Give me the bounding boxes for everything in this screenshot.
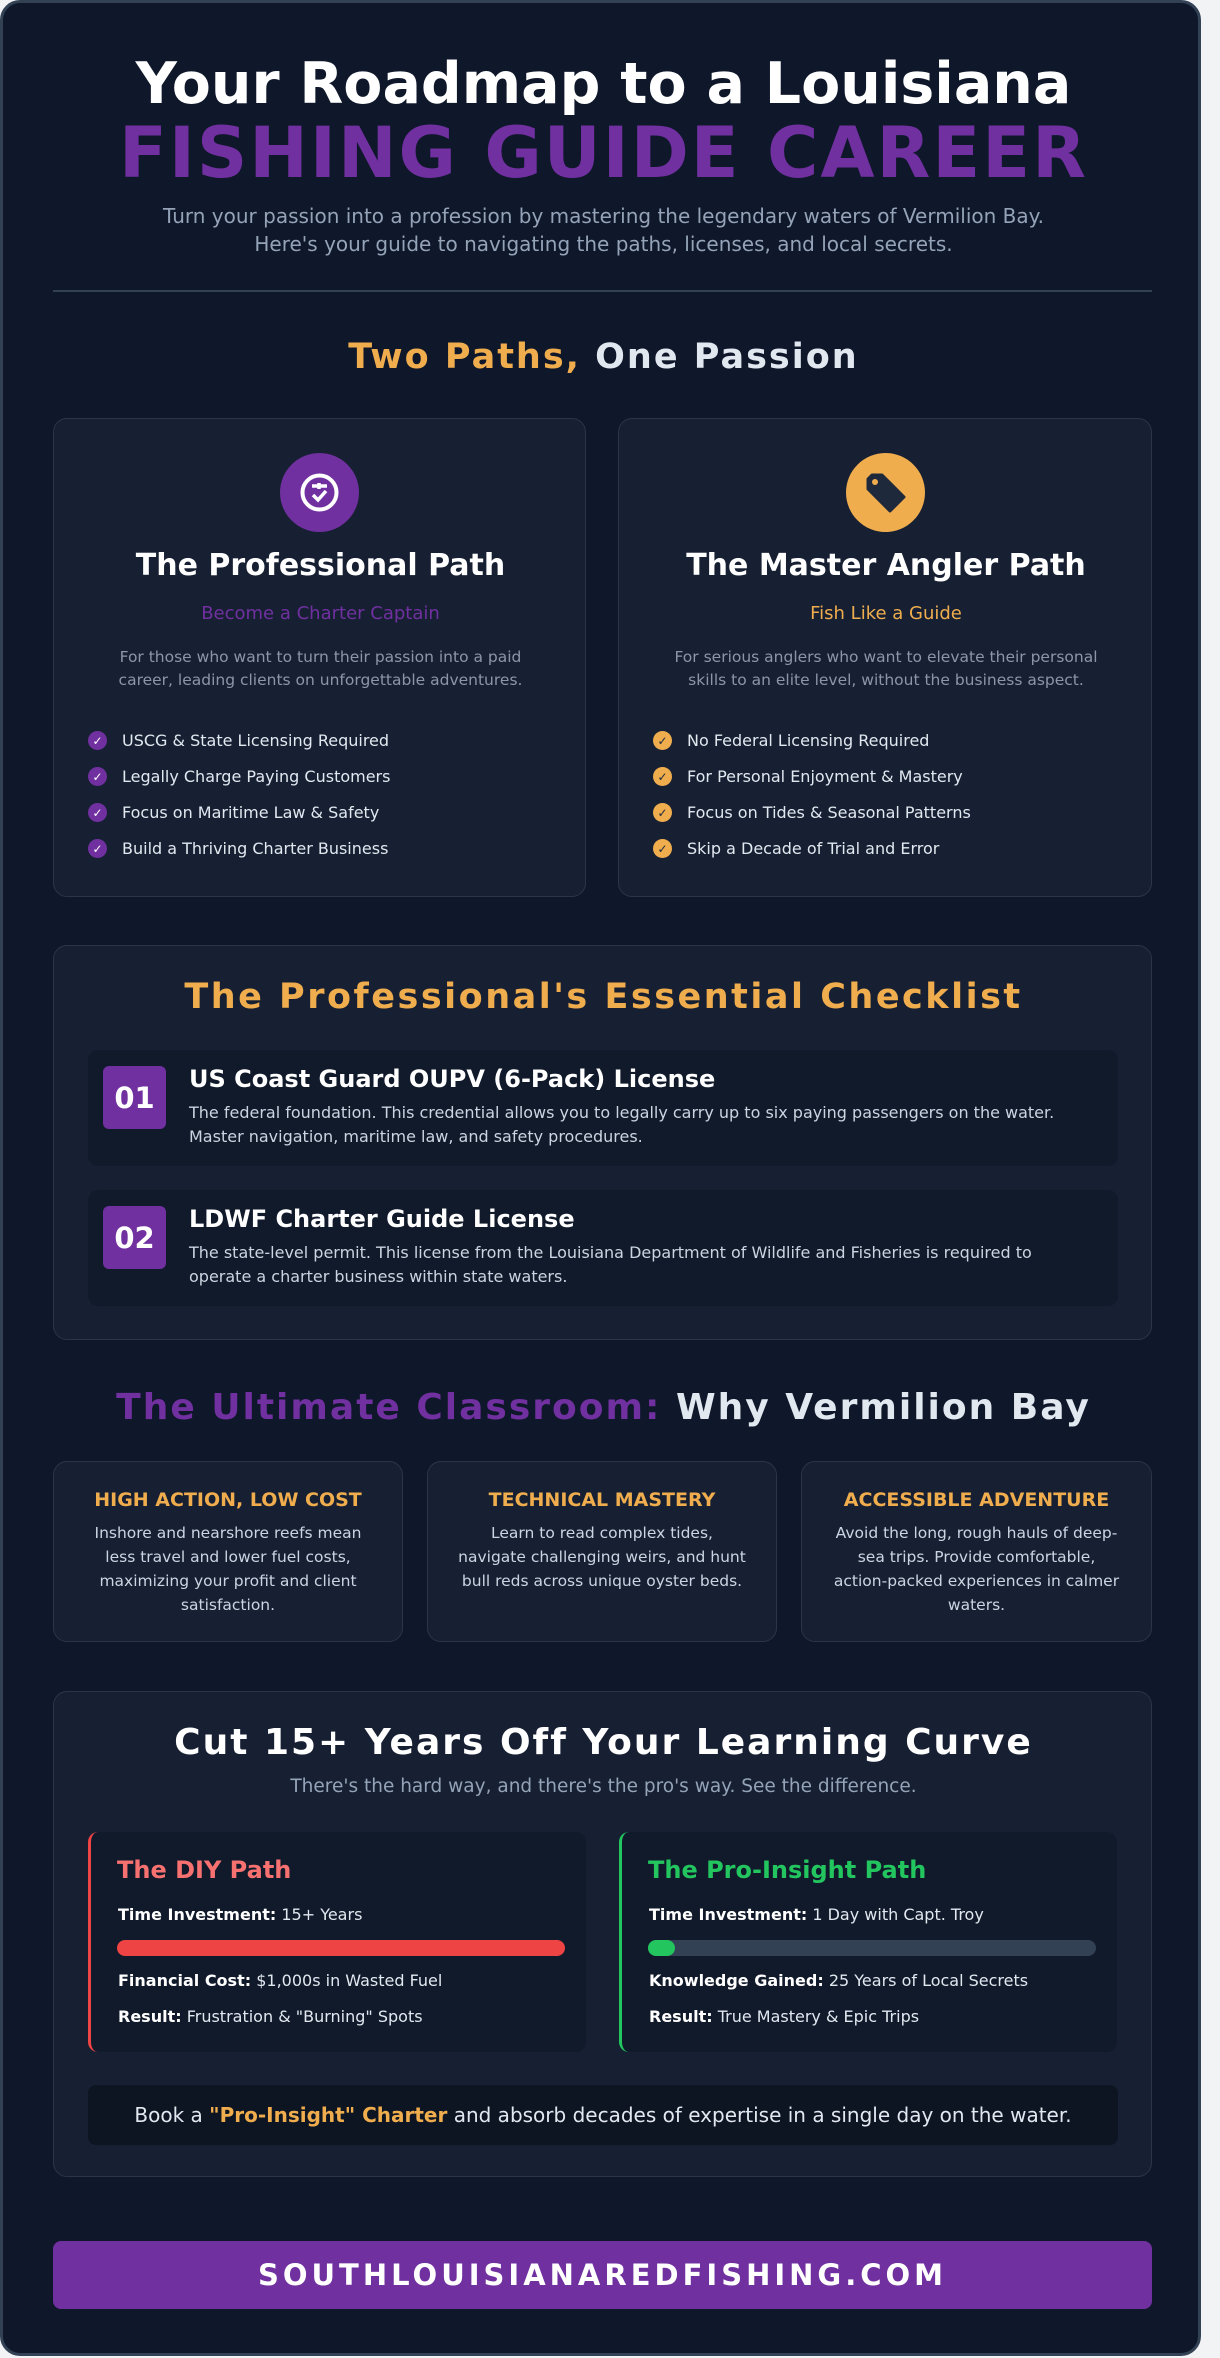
callout: book charter: Book a "Pro-Insight" Charter and absorb decades of expertise in a single day on the water. xyxy=(134,2103,1072,2127)
title xyxy=(119,51,1088,194)
list: master: For Personal Enjoyment & Mastery xyxy=(687,767,963,786)
heading: checklist: The Professional's Essential Checklist xyxy=(184,977,1023,1017)
panel: master angler path: For serious anglers who want to elevate their personal xyxy=(674,648,1098,666)
subtitle xyxy=(162,204,1044,256)
item 01: US Coast Guard OUPV (6-Pack) License xyxy=(189,1065,715,1093)
card: DIY path xyxy=(88,1832,586,2052)
panel: checklist xyxy=(53,945,1152,1340)
item 02 xyxy=(88,1190,1118,1306)
item 02: 02 xyxy=(114,1220,155,1254)
panel: learning curve: There's the hard way, and there's the pro's way. See the difference. xyxy=(290,1776,917,1797)
card: DIY path: Time Investment: 15+ Years xyxy=(118,1905,362,1924)
item 02: operate a charter business within state waters. xyxy=(189,1267,567,1286)
card: technical mastery: navigate challenging weirs, and hunt xyxy=(458,1548,746,1566)
card: high action xyxy=(53,1461,403,1642)
icon: tag xyxy=(846,453,925,532)
item 01: 01 xyxy=(114,1080,155,1114)
list: professional: ✓ xyxy=(92,734,103,748)
subtitle: Turn your passion into a profession by mastering the legendary waters of Vermilion Bay. xyxy=(163,204,1044,228)
item 02: The state-level permit. This license from the Louisiana Department of Wildlife and Fisheries is required to xyxy=(189,1243,1032,1262)
text: card title: The Professional Path xyxy=(136,548,505,583)
panel: professional path xyxy=(53,418,586,897)
list: professional: Focus on Maritime Law & Safety xyxy=(122,803,379,822)
panel: master angler path: skills to an elite level, without the business aspect. xyxy=(688,671,1084,689)
list: professional: Legally Charge Paying Customers xyxy=(122,767,390,786)
card: technical mastery: bull reds across unique oyster beds. xyxy=(462,1572,742,1590)
list: master: Skip a Decade of Trial and Error xyxy=(687,839,939,858)
item 01 xyxy=(88,1050,1118,1166)
footer: website: SOUTHLOUISIANAREDFISHING.COM xyxy=(258,2258,947,2292)
subtitle: Here's your guide to navigating the paths, licenses, and local secrets. xyxy=(254,232,953,256)
card: accessible adventure: waters. xyxy=(948,1596,1005,1614)
panel: professional path: For those who want to turn their passion into a paid xyxy=(120,648,521,666)
list: master: ✓ xyxy=(657,734,668,748)
card: accessible adventure: Avoid the long, rough hauls of deep- xyxy=(836,1524,1117,1542)
list: master: ✓ xyxy=(657,770,668,784)
heading: ultimate classroom: The Ultimate Classroom: Why Vermilion Bay xyxy=(116,1387,1091,1428)
card: DIY path: The DIY Path xyxy=(117,1856,291,1884)
bar: DIY xyxy=(117,1940,565,1956)
item 02: LDWF Charter Guide License xyxy=(189,1205,575,1233)
card: accessible adventure: action-packed experiences in calmer xyxy=(834,1572,1119,1590)
footer: website xyxy=(53,2241,1152,2309)
list: professional: ✓ xyxy=(92,770,103,784)
list: master: ✓ xyxy=(657,806,668,820)
card: pro-insight path: Time Investment: 1 Day with Capt. Troy xyxy=(649,1905,984,1924)
card: accessible adventure: sea trips. Provide comfortable, xyxy=(858,1548,1095,1566)
list: professional xyxy=(88,731,390,858)
title: Your Roadmap to a Louisiana xyxy=(136,51,1071,117)
card: high action: HIGH ACTION, LOW COST xyxy=(94,1489,362,1511)
card: DIY path: Result: Frustration & "Burning" Spots xyxy=(118,2007,423,2026)
list: professional: Build a Thriving Charter Business xyxy=(122,839,388,858)
card: technical mastery: Learn to read complex tides, xyxy=(491,1524,713,1542)
panel: learning curve xyxy=(53,1691,1152,2177)
card: pro-insight path: Result: True Mastery & Epic Trips xyxy=(649,2007,919,2026)
list: master: Focus on Tides & Seasonal Patterns xyxy=(687,803,971,822)
title: FISHING GUIDE CAREER xyxy=(119,112,1088,194)
list: master: ✓ xyxy=(657,842,668,856)
card: high action: Inshore and nearshore reefs mean less travel and lower fuel costs, maximizing your profit and client satisfaction. xyxy=(94,1524,362,1614)
heading: two paths: Two Paths, One Passion xyxy=(348,337,859,377)
heading: learning curve: Cut 15+ Years Off Your Learning Curve xyxy=(174,1722,1033,1763)
item 01: The federal foundation. This credential allows you to legally carry up to six paying passengers on the water. xyxy=(189,1103,1054,1122)
card: DIY path: Financial Cost: $1,000s in Wasted Fuel xyxy=(118,1971,442,1990)
panel: master angler path xyxy=(618,418,1152,897)
list: master: No Federal Licensing Required xyxy=(687,731,929,750)
list: professional: ✓ xyxy=(92,806,103,820)
panel: professional path: Become a Charter Captain xyxy=(201,603,440,624)
card: pro-insight path: Knowledge Gained: 25 Years of Local Secrets xyxy=(649,1971,1028,1990)
icon: captain xyxy=(280,453,359,532)
card: accessible adventure xyxy=(801,1461,1152,1642)
card: pro-insight path xyxy=(619,1832,1117,2052)
text: card title: The Master Angler Path xyxy=(686,548,1086,583)
panel: master angler path: Fish Like a Guide xyxy=(810,603,962,624)
card: technical mastery xyxy=(427,1461,777,1642)
panel: professional path: career, leading clients on unforgettable adventures. xyxy=(119,671,522,689)
card: technical mastery: TECHNICAL MASTERY xyxy=(489,1489,715,1511)
bar: pro xyxy=(648,1940,1096,1956)
list: professional: ✓ xyxy=(92,842,103,856)
callout: book charter xyxy=(88,2085,1118,2145)
card: pro-insight path: The Pro-Insight Path xyxy=(648,1856,926,1884)
item 01: Master navigation, maritime law, and safety procedures. xyxy=(189,1127,643,1146)
list: professional: USCG & State Licensing Required xyxy=(122,731,389,750)
card: accessible adventure: ACCESSIBLE ADVENTURE xyxy=(844,1489,1109,1511)
list: master xyxy=(653,731,971,858)
